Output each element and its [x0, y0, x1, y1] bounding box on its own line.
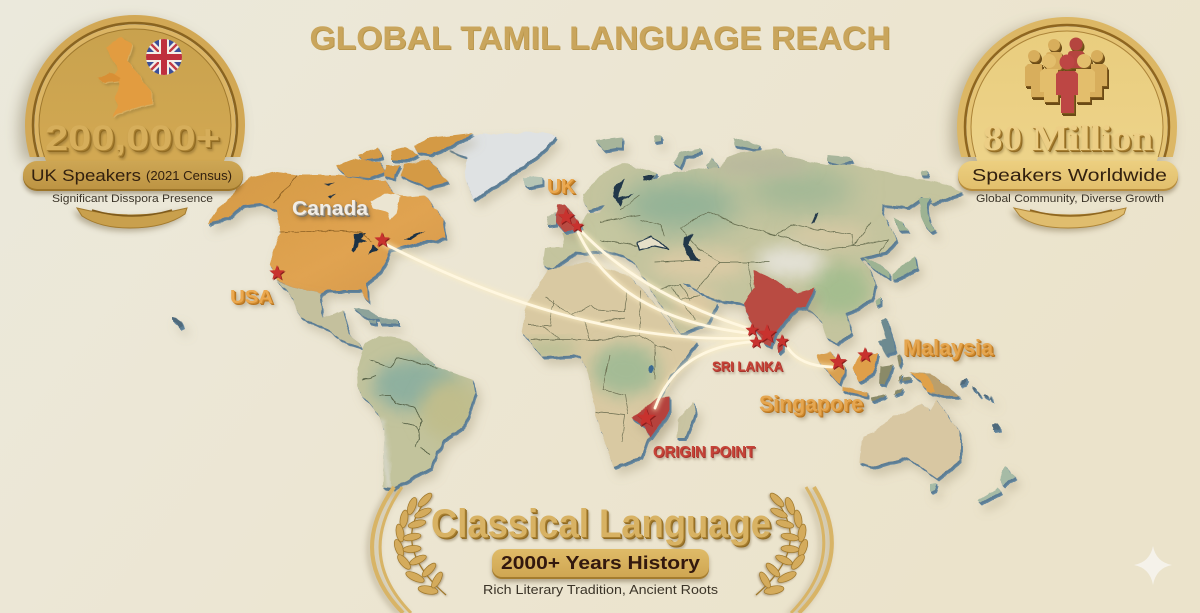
Great Lakes [352, 231, 425, 254]
Mexico and Central America [276, 280, 363, 347]
heading: Classical Language: Classical Language [431, 502, 771, 546]
icon: UK map [98, 37, 152, 116]
icon: Union Jack flag [146, 39, 182, 75]
pill: speakers worldwide [958, 161, 1178, 189]
route arcs [385, 232, 832, 408]
India [743, 270, 815, 346]
Black Sea [638, 237, 668, 250]
Malay Peninsula and Sumatra [817, 352, 868, 396]
label: Origin Point: ORIGIN POINT [653, 444, 755, 461]
glow [385, 232, 832, 408]
Japan and East Asia islands [863, 198, 936, 306]
caption: rich literary tradition: Rich Literary Tradition, Ancient Roots [483, 582, 719, 597]
label: Sri Lanka: SRI LANKA [712, 358, 783, 374]
Greenland [448, 132, 555, 200]
small arctic islands [596, 135, 927, 176]
caption: Global Community, Diverse Growth: Global Community, Diverse Growth [976, 193, 1164, 205]
Eurasia [543, 149, 962, 343]
Caribbean [353, 308, 398, 324]
label: Canada: Canada [292, 198, 369, 220]
title: GLOBAL TAMIL LANGUAGE REACH [310, 20, 890, 56]
Australia [860, 400, 960, 478]
rim and face [12, 12, 246, 168]
New Guinea [910, 372, 960, 397]
lines [385, 232, 832, 408]
pill: UK speakers [23, 161, 243, 189]
North America [207, 172, 446, 302]
right laurel [756, 491, 810, 596]
Madagascar [677, 402, 695, 438]
pill: 2000+ years history: 2000+ Years History [501, 553, 700, 573]
pill: speakers worldwide: Speakers Worldwide [972, 165, 1167, 185]
caption: Significant Disspora Presence: Significant Disspora Presence [52, 193, 213, 205]
South America [357, 335, 480, 490]
icon: sparkle watermark [1134, 546, 1172, 585]
left arcs [372, 487, 411, 613]
United Kingdom and Ireland [547, 204, 582, 232]
base arc [1014, 208, 1126, 228]
pill: UK speakers: UK Speakers [31, 166, 141, 185]
base arc [77, 208, 187, 228]
back row [1025, 39, 1107, 97]
world map [172, 132, 1015, 503]
front row [1040, 54, 1095, 102]
Baltic and White Sea [612, 178, 634, 207]
Canadian arctic islands [337, 133, 473, 187]
stat: 200,000+: 200,000+ [45, 119, 220, 158]
borders [274, 175, 372, 241]
New Zealand [930, 467, 1015, 503]
panel: classical language [372, 487, 832, 613]
Sri Lanka land [778, 343, 784, 353]
map labels [230, 176, 994, 461]
stat: 80 Million: 80 Million [983, 118, 1153, 158]
Caspian Sea [683, 234, 700, 262]
Borneo [852, 353, 878, 382]
Pacific islands [172, 317, 999, 431]
Africa [520, 262, 697, 467]
rim and face [944, 15, 1178, 168]
label: UK: UK [547, 176, 576, 198]
Hudson Bay [370, 193, 400, 220]
Sulawesi and Lesser Sunda [872, 354, 911, 401]
right arcs [791, 487, 832, 613]
label: Malaysia: Malaysia [903, 335, 994, 360]
Philippines [878, 318, 896, 355]
label: Singapore: Singapore [759, 391, 863, 416]
badge: UK speakers [23, 19, 243, 231]
pill: UK speakers: (2021 Census) [146, 168, 232, 183]
Iceland [523, 176, 542, 187]
Mozambique [632, 397, 670, 438]
icon: people group [1025, 38, 1107, 113]
left laurel [392, 491, 446, 596]
location stars [269, 208, 873, 426]
badge: 80 million speakers [958, 21, 1178, 233]
label: USA: USA [230, 287, 273, 307]
pill: 2000+ years history [492, 549, 709, 577]
